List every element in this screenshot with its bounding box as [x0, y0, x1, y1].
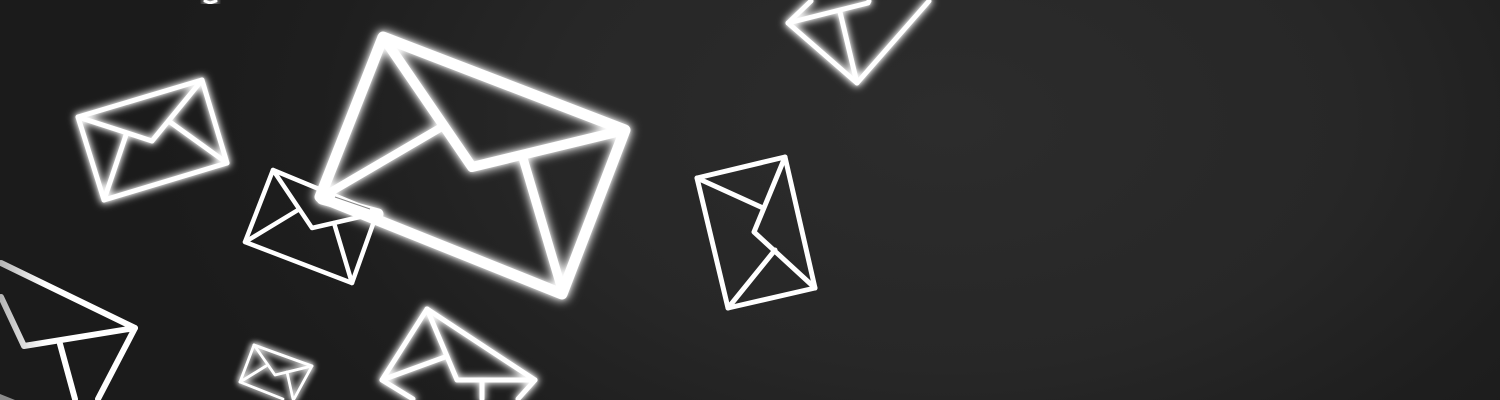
- icon: upright envelope at centre: [697, 157, 815, 308]
- icon: tiny dim envelope at bottom: [240, 345, 312, 399]
- icon: glowing envelope at bottom centre: [382, 309, 535, 399]
- icon: envelope at top right, cropped by the top edge: [788, 1, 929, 83]
- icon: large envelope at lower left edge: [1, 263, 135, 399]
- icon: grey corner fragment at lower left: [0, 394, 15, 400]
- icon: envelope fragment at top edge: [205, 1, 216, 3]
- icon: envelope upper left: [78, 80, 227, 200]
- icon: small envelope behind the large one: [245, 170, 377, 283]
- detail: thin seam on the large envelope: [335, 197, 370, 209]
- icon: large glowing envelope: [320, 37, 625, 294]
